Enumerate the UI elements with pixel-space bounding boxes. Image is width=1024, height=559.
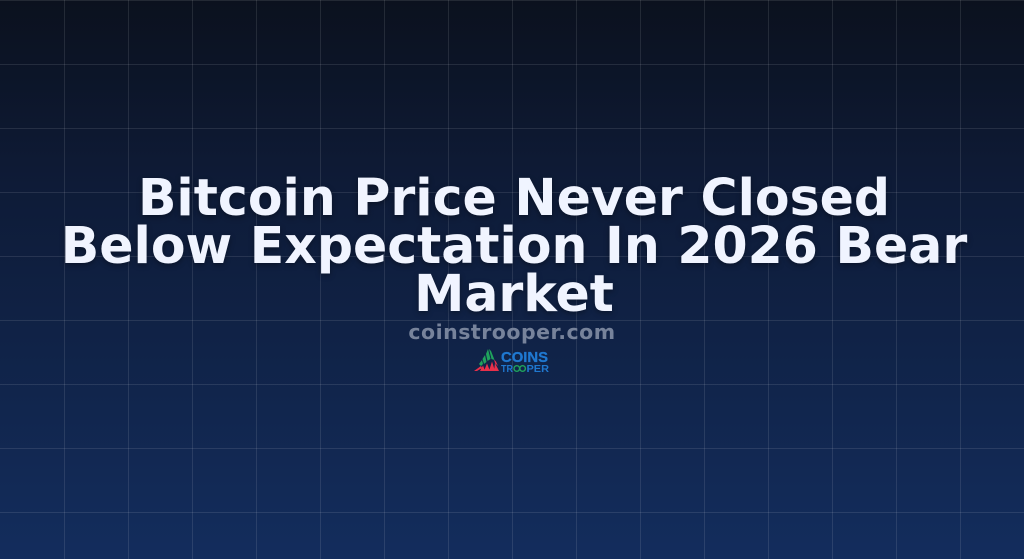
logo text: TROOPER: PER — [526, 364, 550, 375]
logo text: TROOPER: TR — [501, 364, 514, 375]
website label: coinstrooper.com — [408, 320, 616, 344]
title — [61, 168, 968, 323]
logo text: TROOPER — [501, 364, 550, 375]
title: Bitcoin Price Never Closed — [138, 168, 890, 227]
logo: Coins Trooper — [474, 349, 550, 375]
icon: green and red chart mountain — [474, 349, 499, 371]
title: Market — [414, 264, 614, 323]
logo text: COINS: COINS — [501, 349, 548, 366]
title: Below Expectation In 2026 Bear — [61, 216, 967, 275]
